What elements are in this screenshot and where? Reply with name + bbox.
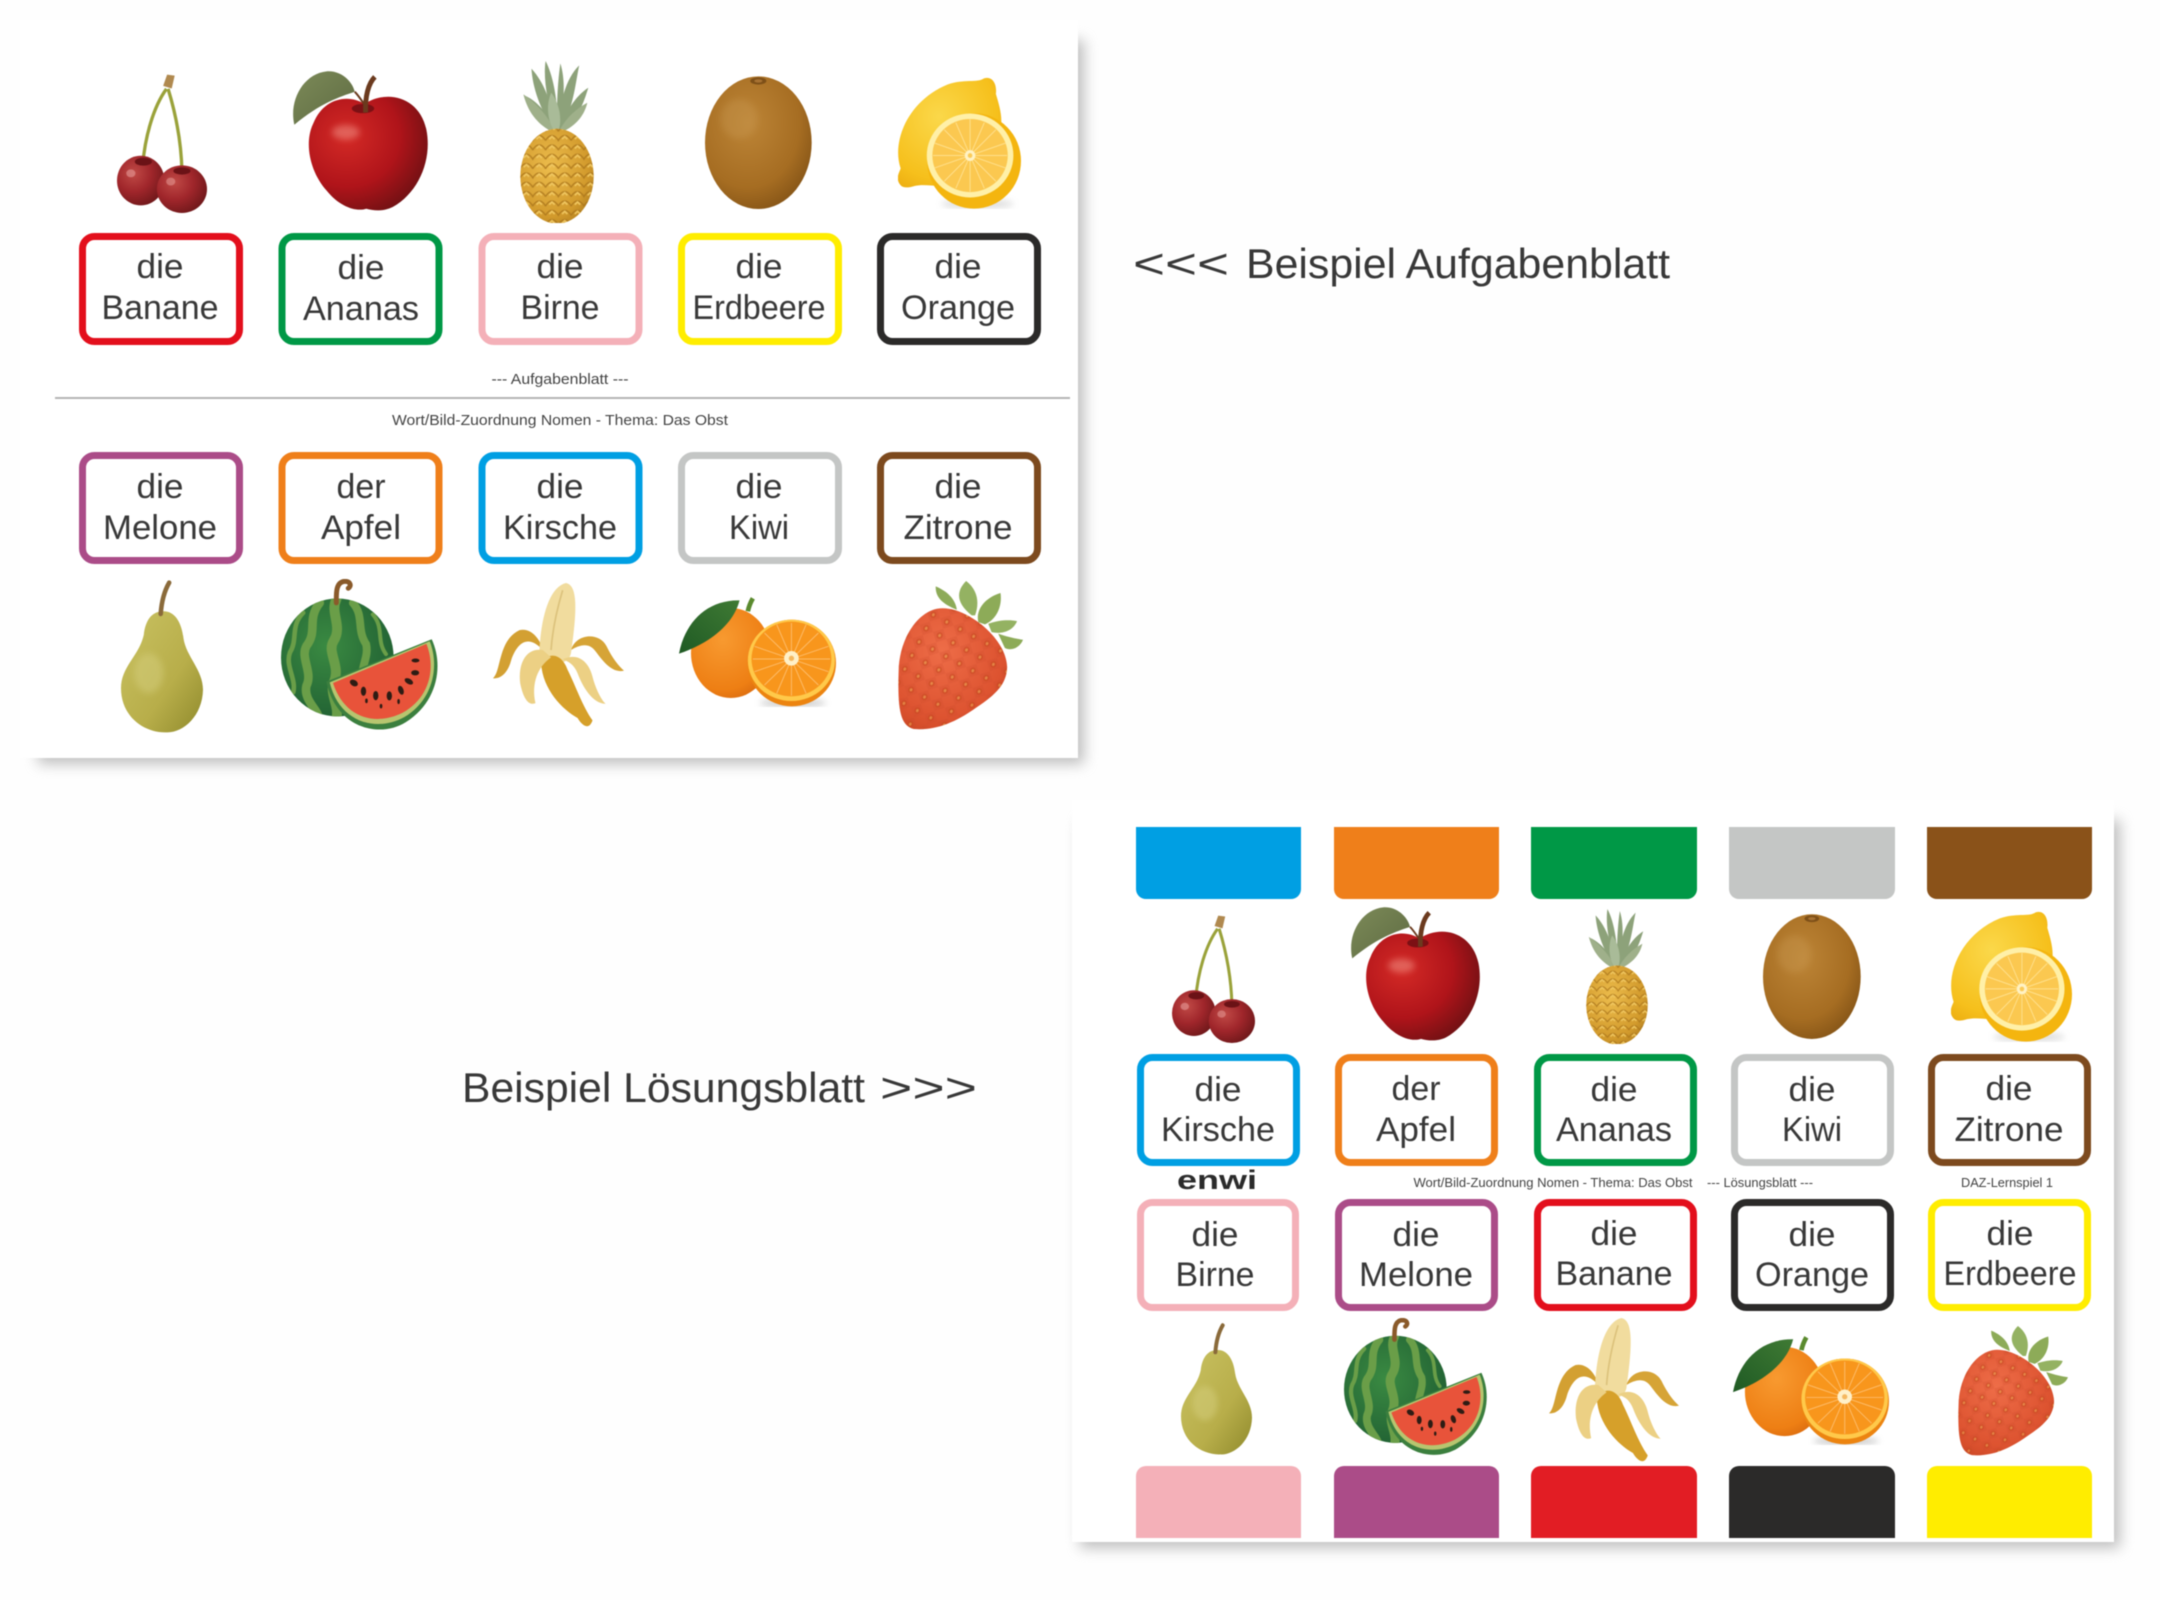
icon: lemon (898, 78, 1021, 209)
word card: die Melone (82, 456, 240, 560)
icon: watermelon (1344, 1320, 1487, 1455)
word card: die Ananas: die (1590, 1071, 1638, 1109)
icon: orange (1733, 1337, 1889, 1445)
word card: die Zitrone: Zitrone (904, 509, 1012, 547)
word card: die Kiwi (682, 456, 838, 560)
icon: pear (1181, 1325, 1252, 1454)
heading: Beispiel Lösungsblatt: Beispiel Lösungsblatt (462, 1064, 865, 1111)
word card: die Kirsche: Kirsche (1161, 1111, 1275, 1149)
icon: strawberry (1955, 1326, 2068, 1459)
word card: der Apfel (1338, 1058, 1494, 1162)
word card: die Ananas: die (338, 249, 384, 287)
word card: der Apfel: der (336, 468, 386, 506)
word card: die Zitrone (880, 456, 1038, 560)
word card: die Banane (82, 236, 240, 342)
icon: orange (679, 598, 836, 707)
word card: die Zitrone: die (1986, 1070, 2032, 1108)
icon: lemon (1951, 912, 2072, 1042)
swatch: purple (1334, 1466, 1499, 1538)
word card: die Ananas (1538, 1058, 1694, 1162)
swatch: brown (1927, 827, 2092, 899)
word card: der Apfel: Apfel (321, 509, 401, 547)
word card: die Erdbeere: die (1986, 1215, 2034, 1253)
icon: pineapple (520, 61, 594, 225)
word card: die Kiwi: die (1788, 1071, 1836, 1109)
icon: pear (121, 583, 203, 732)
word card: die Banane (1538, 1202, 1694, 1308)
icon: banana (493, 583, 624, 726)
swatch: pink (1136, 1466, 1301, 1538)
word card: die Orange: Orange (1755, 1256, 1869, 1294)
word card: die Kirsche: die (536, 468, 584, 506)
word card: die Birne (482, 236, 639, 342)
word card: die Kiwi: Kiwi (1782, 1111, 1842, 1149)
swatch: orange (1334, 827, 1499, 899)
panel: Lösungsblatt (1072, 800, 2120, 1548)
swatch: red (1531, 1466, 1697, 1538)
word card: die Kiwi (1734, 1058, 1890, 1162)
word card: die Zitrone: die (934, 468, 982, 506)
panel: Aufgabenblatt (20, 20, 1084, 764)
logo: enwi: enwi (1177, 1165, 1257, 1195)
icon: apple (1351, 907, 1480, 1040)
heading: Beispiel Lösungsblatt: >>> (880, 1064, 977, 1111)
swatch: green (1531, 827, 1697, 899)
word card: die Erdbeere: Erdbeere (1944, 1255, 2076, 1293)
swatch: grey (1729, 827, 1895, 899)
word card: die Kirsche (482, 456, 639, 560)
word card: die Orange (880, 236, 1038, 342)
word card: die Erdbeere (682, 236, 838, 342)
sheet caption: --- Aufgabenblatt --- (492, 371, 628, 388)
icon: cherry (1172, 916, 1255, 1043)
swatch: yellow (1927, 1466, 2092, 1538)
word card: die Melone: die (136, 468, 184, 506)
word card: die Birne: die (536, 248, 584, 286)
word card: die Ananas: Ananas (303, 290, 419, 328)
game label: DAZ-Lernspiel 1 (1961, 1175, 2053, 1190)
word card: die Melone: die (1392, 1216, 1440, 1254)
word card: die Birne (1140, 1202, 1296, 1308)
word card: die Orange: die (934, 248, 982, 286)
word card: die Banane: Banane (1556, 1255, 1672, 1293)
word card: der Apfel: Apfel (1376, 1111, 1456, 1149)
icon: cherry (117, 75, 207, 213)
icon: strawberry (894, 581, 1023, 734)
word card: die Orange: Orange (901, 289, 1015, 327)
sheet caption: --- Lösungsblatt --- (1707, 1175, 1813, 1190)
word card: der Apfel: der (1392, 1070, 1440, 1108)
sheet subtitle: Wort/Bild-Zuordnung Nomen - Thema: Das Obst (1414, 1175, 1693, 1190)
word card: die Banane: Banane (102, 289, 218, 327)
word card: die Orange (1734, 1202, 1890, 1308)
icon: kiwi (705, 76, 812, 209)
icon: pineapple (1586, 909, 1648, 1045)
word card: die Kirsche: Kirsche (503, 509, 617, 547)
word card: die Melone (1338, 1202, 1494, 1308)
word card: die Erdbeere (1932, 1202, 2088, 1308)
icon: watermelon (281, 581, 437, 730)
word card: die Zitrone: Zitrone (1954, 1111, 2064, 1149)
word card: die Erdbeere: die (736, 248, 782, 286)
word card: die Birne: Birne (1176, 1256, 1254, 1294)
icon: banana (1549, 1318, 1679, 1461)
heading: Beispiel Aufgabenblatt: <<< (1133, 240, 1229, 287)
word card: die Kirsche (1140, 1058, 1296, 1162)
heading: Beispiel Aufgabenblatt: Beispiel Aufgabenblatt (1246, 240, 1670, 287)
word card: der Apfel (282, 456, 439, 560)
swatch: black (1729, 1466, 1895, 1538)
word card: die Ananas (282, 236, 439, 342)
word card: die Birne: Birne (520, 289, 600, 327)
word card: die Zitrone (1932, 1058, 2088, 1162)
word card: die Melone: Melone (1359, 1256, 1473, 1294)
icon: apple (293, 71, 428, 210)
word card: die Ananas: Ananas (1556, 1111, 1672, 1149)
word card: die Birne: die (1192, 1216, 1238, 1254)
word card: die Melone: Melone (103, 509, 217, 547)
sheet subtitle: Wort/Bild-Zuordnung Nomen - Thema: Das Obst (392, 412, 729, 429)
word card: die Kirsche: die (1194, 1071, 1242, 1109)
word card: die Orange: die (1788, 1216, 1836, 1254)
icon: kiwi (1763, 914, 1861, 1039)
word card: die Kiwi: Kiwi (729, 509, 789, 547)
swatch: blue (1136, 827, 1301, 899)
word card: die Kiwi: die (736, 468, 782, 506)
word card: die Banane: die (136, 248, 184, 286)
word card: die Banane: die (1590, 1215, 1638, 1253)
word card: die Erdbeere: Erdbeere (692, 289, 826, 327)
